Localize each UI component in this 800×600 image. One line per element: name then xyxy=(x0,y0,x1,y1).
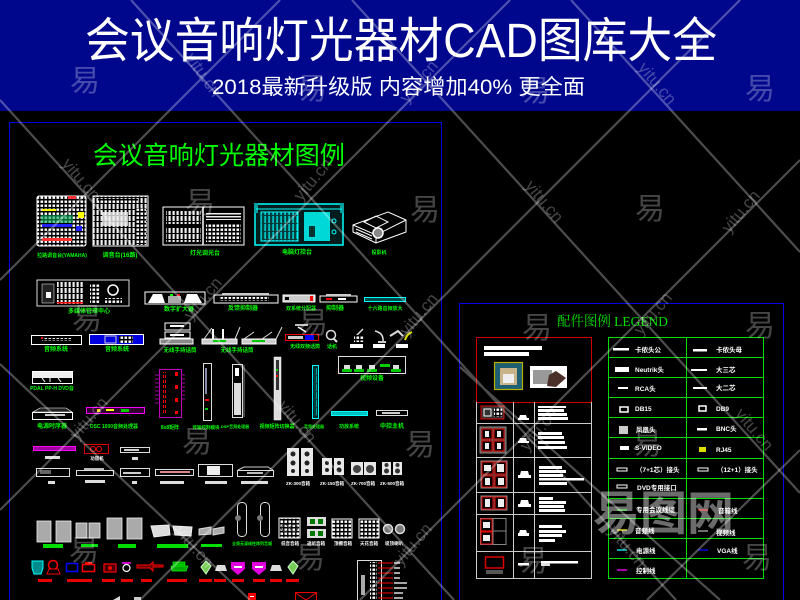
subtitle: 2018最新升级版 内容增加40% 更全面 xyxy=(212,76,585,99)
icon: vertical rack unit 3 xyxy=(274,357,281,420)
label: 多媒体管理中心 xyxy=(68,307,110,315)
label: 话机 xyxy=(327,343,337,350)
watermark site names: yitu.cn xyxy=(274,397,320,446)
red box: floor socket xyxy=(476,338,592,402)
watermark glyphs: 易 xyxy=(522,312,552,345)
watermark glyphs: 易 xyxy=(410,194,440,227)
header banner xyxy=(0,0,800,111)
icon: white bar unit xyxy=(376,410,408,416)
label: 十六路音频放大 xyxy=(367,305,403,312)
label: 低音音箱 xyxy=(281,540,299,547)
icon: equipment rack with connections xyxy=(358,560,407,600)
connector: 7+1: （7+1芯）接头 xyxy=(636,465,680,474)
panel border xyxy=(460,304,784,600)
watermark site names: yitu.cn xyxy=(290,155,336,204)
row 5 xyxy=(480,518,566,544)
green label bars xyxy=(43,544,222,548)
label bar xyxy=(132,457,138,460)
row 6 xyxy=(486,557,578,574)
watermark site names: yitu.cn xyxy=(171,522,217,571)
label: 传输控制模块 xyxy=(192,424,220,431)
connector: RCA: RCA头 xyxy=(635,384,656,393)
icon: red device xyxy=(84,444,108,454)
label: 中控主机 xyxy=(380,422,404,430)
row 2 xyxy=(480,427,567,453)
label: 视频矩阵切换器 xyxy=(259,423,295,430)
watermark site names: yitu.cn xyxy=(66,394,112,443)
label: 数字扩大器 xyxy=(164,305,194,313)
photo: floor socket box xyxy=(530,366,567,388)
icon: wireless microphone receivers xyxy=(202,327,282,344)
label: 音频系统 xyxy=(105,345,129,353)
label: 拉路调音台(YAMAHA) xyxy=(37,252,87,259)
table grid xyxy=(608,337,764,578)
connector: DVD xyxy=(617,483,677,492)
cable: audio: 音频线 xyxy=(635,526,655,535)
watermark site names: yitu.cn xyxy=(396,57,442,106)
icon: wireless base panel xyxy=(338,356,406,374)
label: 无线手持话筒 xyxy=(163,346,197,354)
label: 无线手持话筒 xyxy=(220,346,254,354)
connector: DVD: DVD专用接口 xyxy=(637,483,677,492)
watermark site names: yitu.cn xyxy=(630,289,676,338)
title bars xyxy=(484,346,542,350)
watermark glyphs: 易 xyxy=(745,73,775,106)
watermark site names: yitu.cn xyxy=(604,522,650,571)
connector: DB15: DB15 xyxy=(635,406,652,413)
icon: wireless handheld microphone receiver stack xyxy=(160,323,193,344)
connector: S-VIDEO xyxy=(620,445,662,452)
label: 双系统分配器 xyxy=(286,305,316,312)
label: 反馈抑制器 xyxy=(228,304,258,312)
icon: white device xyxy=(120,448,150,452)
watermark: large site logo: 易图网 xyxy=(593,475,734,544)
label: 全频无源线性阵列音箱 xyxy=(232,540,272,546)
connector: two-core xyxy=(693,383,736,392)
connector: 12+1 xyxy=(698,465,758,474)
label: ZK-300音箱 xyxy=(286,480,310,487)
watermark glyphs xyxy=(69,65,775,578)
icon: mixer 2 xyxy=(93,196,148,246)
connector: Phoenix: 凤凰头 xyxy=(636,425,656,434)
icon: mixer 1 xyxy=(37,196,86,246)
icon: power sequencer xyxy=(32,408,72,420)
watermark glyphs: 易 xyxy=(742,542,772,575)
connector: Neutrik: Neutrik头 xyxy=(635,365,664,374)
watermark site names: yitu.cn xyxy=(390,520,436,569)
icon: vertical rack unit 1 xyxy=(204,364,212,420)
watermark site names: yitu.cn xyxy=(718,187,764,236)
icon: cyan vertical rack xyxy=(312,366,318,418)
cable: VGA xyxy=(698,546,738,555)
connector: RCA xyxy=(618,384,656,393)
watermark glyphs: 易 xyxy=(182,426,212,459)
row 4 xyxy=(481,496,566,512)
label bar xyxy=(45,456,60,459)
label: 功放机 xyxy=(90,455,104,462)
label: 投影机 xyxy=(371,249,387,256)
label: 电脑灯控台 xyxy=(282,248,312,256)
cable: control xyxy=(617,566,656,575)
connector: S-VIDEO: S-VIDEO xyxy=(635,445,662,452)
icon: digital amplifier xyxy=(145,292,205,304)
row: gray wall speakers xyxy=(37,518,224,542)
watermark site names: yitu.cn xyxy=(182,49,225,100)
icon: handset xyxy=(326,330,337,342)
cable: conference xyxy=(617,505,676,514)
cable: VGA: VGA线 xyxy=(717,546,738,555)
connector: 12+1: （12+1）接头 xyxy=(717,465,758,474)
cable: conference: 专用会议线缆 xyxy=(636,505,676,514)
watermark site names: yitu.cn xyxy=(516,405,562,454)
icon: vertical rack unit 2 xyxy=(232,364,244,418)
watermark site names: yitu.cn xyxy=(180,274,226,323)
table: connectors and cables xyxy=(608,337,764,578)
cable: audio xyxy=(617,526,655,535)
panel: accessories legend xyxy=(460,304,784,600)
connector: RJ45: RJ45 xyxy=(716,447,732,454)
watermark glyphs: 易 xyxy=(518,545,548,578)
connector: DB9 xyxy=(699,406,729,413)
red label bars xyxy=(38,579,299,582)
table grid xyxy=(476,402,592,578)
icon: cyan bar unit xyxy=(332,412,368,416)
connector: XLR male: 卡侬头公 xyxy=(635,345,662,354)
connector: Neutrik xyxy=(615,365,664,374)
label: 音频处理器 xyxy=(304,423,324,429)
icon: PA unit xyxy=(32,372,72,384)
connector: DB15 xyxy=(620,406,652,413)
connector: Phoenix xyxy=(619,425,656,434)
connector: XLR female: 卡侬头母 xyxy=(716,345,742,354)
connector: RJ45 xyxy=(699,447,732,454)
label: DSP音频处理器 xyxy=(221,423,249,429)
label: 吸顶喇叭 xyxy=(385,540,403,547)
panel border xyxy=(10,122,442,600)
label: PDAL PP-H DVD音 xyxy=(30,385,74,392)
cable: video: 视频线 xyxy=(716,528,736,537)
icon: feedback suppressor xyxy=(214,293,278,303)
table: socket specifications xyxy=(476,402,592,578)
icon: blue audio unit xyxy=(90,334,144,344)
connector: BNC: BNC头 xyxy=(716,424,737,433)
label: 无线双频话筒 xyxy=(290,343,320,350)
icon: speaker grid xyxy=(279,517,404,538)
icon: bottom row fragments xyxy=(113,592,316,600)
watermark glyphs: 易 xyxy=(70,65,100,98)
icon: computer lighting console xyxy=(254,203,344,245)
watermark glyphs: 易 xyxy=(520,75,550,108)
connector: DB9: DB9 xyxy=(716,406,729,413)
watermark glyphs: 易 xyxy=(185,187,215,220)
watermark glyphs: 易 xyxy=(405,429,435,462)
connector: three-core: 大三芯 xyxy=(716,365,736,374)
icon: dual system distributor xyxy=(283,295,315,302)
icon: column speakers xyxy=(235,502,270,536)
icon: magenta rack xyxy=(155,370,185,418)
panel heading: 配件图例 LEGEND xyxy=(557,314,668,330)
icon: matrix switcher xyxy=(86,408,144,414)
label: DSC 1000音频处理器 xyxy=(90,423,138,430)
watermark site names: yitu.cn xyxy=(396,290,442,339)
cable: video xyxy=(698,528,736,537)
icon: wireless dual band microphone xyxy=(286,325,318,340)
watermark site names xyxy=(58,49,777,571)
watermark glyphs: 易 xyxy=(295,542,325,575)
label: ZK-700音箱 xyxy=(351,480,375,487)
label: ZK-500音箱 xyxy=(380,480,404,487)
label: 视频设备 xyxy=(360,374,384,382)
connector: two-core: 大二芯 xyxy=(716,383,736,392)
icon: suppressor xyxy=(320,294,357,302)
cable: power xyxy=(617,546,656,555)
icon: audio system unit xyxy=(32,336,82,344)
row 1 xyxy=(481,406,568,420)
row 3 xyxy=(481,461,584,488)
label: 灯光调光台 xyxy=(190,249,220,257)
icon: projector xyxy=(353,212,406,243)
cable: speaker: 音箱线 xyxy=(718,506,738,515)
label: 电源时序器 xyxy=(37,422,67,430)
row: rack units with label bars xyxy=(36,464,274,484)
panel heading: 会议音响灯光器材图例 xyxy=(93,142,345,170)
icon: sixteen channel amplifier xyxy=(364,298,406,302)
label: 功放系统 xyxy=(339,423,359,430)
label: 抑制器 xyxy=(326,304,344,312)
photo: open floor socket xyxy=(494,362,522,390)
watermark glyphs: 易 xyxy=(635,193,665,226)
cable: power: 电源线 xyxy=(636,546,656,555)
watermark site names: yitu.cn xyxy=(58,155,104,204)
watermark glyphs: 易 xyxy=(72,303,102,336)
connector: XLR male xyxy=(613,345,662,354)
label: 8x8矩阵 xyxy=(161,424,179,431)
row: speaker cabinets xyxy=(287,448,402,476)
label: ZK-150音箱 xyxy=(320,480,344,487)
watermark glyphs: 易 xyxy=(632,428,662,461)
row: stage lights xyxy=(32,560,298,575)
label: 天花音箱 xyxy=(360,540,378,547)
watermark site names: yitu.cn xyxy=(521,177,567,226)
label: 调音台(16路) xyxy=(103,251,137,259)
label: 返听音箱 xyxy=(307,540,325,547)
icon: multimedia control center xyxy=(37,280,129,306)
panel: equipment legend xyxy=(10,122,442,600)
connector: three-core xyxy=(691,365,736,374)
connector: BNC xyxy=(697,424,737,433)
watermark site names: yitu.cn xyxy=(634,59,680,108)
connector: XLR female xyxy=(693,345,742,354)
icon: magenta device xyxy=(34,446,76,450)
icon: lighting console xyxy=(163,207,244,245)
watermark glyphs: 易 xyxy=(297,73,327,106)
cable: control: 控制线 xyxy=(636,566,656,575)
watermark site names: yitu.cn xyxy=(731,405,777,454)
cable: speaker xyxy=(698,506,738,515)
icon: gooseneck microphones xyxy=(350,329,412,348)
watermark glyphs: 易 xyxy=(298,307,328,340)
watermark glyphs: 易 xyxy=(69,535,99,568)
label: 顶棚音箱 xyxy=(334,540,352,547)
connector: 7+1 xyxy=(617,465,680,474)
title: 会议音响灯光器材CAD图库大全 xyxy=(85,15,717,68)
watermark glyphs: 易 xyxy=(745,310,775,343)
label: 音频系统 xyxy=(44,345,68,353)
